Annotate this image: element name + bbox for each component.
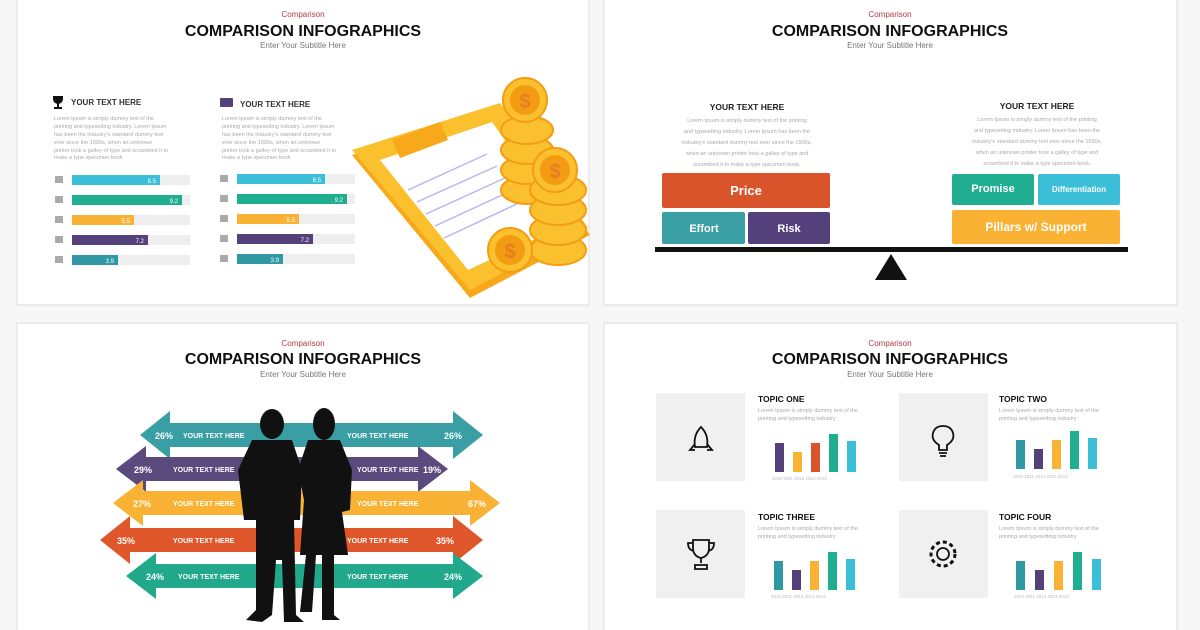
column 2 text: ever since the 1500s, when an unknown (222, 140, 320, 146)
arrows: 29% (134, 465, 152, 475)
arrows: YOUR TEXT HERE (173, 467, 235, 474)
topic two: TOPIC TWO (999, 394, 1047, 404)
arrows: 35% (436, 536, 454, 546)
scale beam and fulcrum (655, 247, 1128, 280)
illustration: clipboard with coins: $ (519, 91, 531, 113)
heading: bottom-right: Enter Your Subtitle Here (847, 370, 933, 379)
column 1 text (53, 96, 168, 161)
column 2 bars (220, 174, 355, 264)
column 2 text: has been the industry's standard dummy text (222, 132, 332, 138)
column 2 bars: 8.5 (313, 178, 322, 184)
blocks right: Promise (971, 183, 1015, 195)
arrows: 67% (468, 499, 486, 509)
topic one: 2010 2011 2012 2013 2014 (772, 476, 827, 481)
topic four: Lorem Ipsum is simply dummy text of the (999, 526, 1099, 532)
column 2 bars: 5.5 (287, 218, 296, 224)
heading: top-left: COMPARISON INFOGRAPHICS (185, 23, 421, 40)
heading: bottom-left: Comparison (281, 339, 325, 348)
text right: scrambled it to make a type specimen book. (983, 161, 1091, 167)
arrows: YOUR TEXT HERE (357, 501, 419, 508)
illustration: clipboard with coins: $ (549, 161, 561, 183)
heading: top-right: Comparison (868, 10, 912, 19)
text left: YOUR TEXT HERE (710, 102, 785, 112)
heading: top-right: COMPARISON INFOGRAPHICS (772, 23, 1008, 40)
topic four: 2010 2011 2012 2013 2014 (1014, 594, 1069, 599)
arrows: YOUR TEXT HERE (178, 574, 240, 581)
topic four: printing and typesetting industry (999, 534, 1077, 540)
column 1 text: make a type specimen book (54, 155, 123, 161)
arrows (100, 411, 500, 599)
panel: bottom-left arrows (17, 323, 589, 630)
text left: and typesetting industry. Lorem Ipsum has been the (684, 129, 810, 135)
silhouettes: business people (238, 408, 352, 622)
blocks right (952, 174, 1120, 244)
heading: bottom-right: COMPARISON INFOGRAPHICS (772, 351, 1008, 368)
text left: industry's standard dummy text ever since the 1500s, (682, 140, 812, 146)
column 2 text: Lorem Ipsum is simply dummy text of the (222, 116, 322, 122)
blocks right: Differentiation (1052, 185, 1106, 194)
blocks left: Price (730, 183, 762, 198)
topic one (656, 393, 858, 481)
topic three (656, 510, 858, 599)
topic three: printing and typesetting industry (758, 534, 836, 540)
text right: industry's standard dummy text ever since the 1500s, (972, 139, 1102, 145)
column 2 text: YOUR TEXT HERE (240, 100, 311, 109)
arrows: YOUR TEXT HERE (347, 433, 409, 440)
arrows: 19% (423, 465, 441, 475)
column 2 bars: 9.2 (335, 198, 344, 204)
topic four: TOPIC FOUR (999, 512, 1051, 522)
arrows: YOUR TEXT HERE (347, 538, 409, 545)
blocks right: Pillars w/ Support (985, 220, 1087, 234)
panel: top-left bars (17, 0, 590, 305)
text left: scrambled it to make a type specimen book. (693, 162, 801, 168)
column 2 text: printing and typesetting industry. Lorem Ipsum (222, 124, 335, 130)
heading: bottom-left: COMPARISON INFOGRAPHICS (185, 351, 421, 368)
column 1 bars: 5.5 (122, 219, 131, 225)
arrows: 26% (155, 431, 173, 441)
column 1 bars (55, 175, 190, 265)
heading: top-right (772, 10, 1008, 50)
blocks left: Risk (777, 223, 801, 235)
arrows: YOUR TEXT HERE (173, 501, 235, 508)
column 2 bars: 3.9 (271, 258, 280, 264)
heading: bottom-left (185, 339, 421, 379)
arrows: 24% (146, 572, 164, 582)
column 2 text (220, 98, 336, 161)
text right (972, 101, 1102, 167)
blocks left: Effort (689, 223, 719, 235)
arrows: YOUR TEXT HERE (347, 574, 409, 581)
text left (682, 102, 812, 168)
blocks left (662, 173, 830, 244)
arrows: 24% (444, 572, 462, 582)
text right: and typesetting industry. Lorem Ipsum has been the (974, 128, 1100, 134)
topic three: TOPIC THREE (758, 512, 815, 522)
topic three: Lorem Ipsum is simply dummy text of the (758, 526, 858, 532)
arrows: YOUR TEXT HERE (173, 538, 235, 545)
column 1 text: printing and typesetting industry. Lorem Ipsum (54, 124, 167, 130)
topic four (899, 510, 1101, 599)
column 2 bars: 7.2 (301, 238, 310, 244)
column 1 text: ever since the 1500s, when an unknown (54, 140, 152, 146)
arrows: 27% (133, 499, 151, 509)
arrows: YOUR TEXT HERE (357, 467, 419, 474)
heading: top-left: Comparison (281, 10, 325, 19)
column 1 text: YOUR TEXT HERE (71, 98, 142, 107)
topic one: printing and typesetting industry (758, 416, 836, 422)
heading: bottom-right: Comparison (868, 339, 912, 348)
text right: Lorem Ipsum is simply dummy text of the printing (977, 117, 1097, 123)
arrows: 35% (117, 536, 135, 546)
column 1 bars: 8.5 (148, 179, 157, 185)
heading: top-left (185, 10, 421, 50)
column 1 text: Lorem Ipsum is simply dummy text of the (54, 116, 154, 122)
heading: top-left: Enter Your Subtitle Here (260, 41, 346, 50)
text right: YOUR TEXT HERE (1000, 101, 1075, 111)
column 2 text: make a type specimen book (222, 155, 291, 161)
arrows: YOUR TEXT HERE (183, 433, 245, 440)
panel: bottom-right topics (604, 323, 1177, 630)
topic two (899, 393, 1099, 481)
text left: Lorem Ipsum is simply dummy text of the printing (687, 118, 807, 124)
column 1 text: printer took a galley of type and scrambled it to (54, 148, 168, 154)
topic two: 2010 2011 2012 2013 2014 (1013, 474, 1068, 479)
column 1 text: has been the industry's standard dummy text (54, 132, 164, 138)
column 1 bars: 3.9 (106, 259, 115, 265)
column 1 bars: 7.2 (136, 239, 145, 245)
topic two: Lorem Ipsum is simply dummy text of the (999, 408, 1099, 414)
panel: top-right balance (604, 0, 1177, 305)
heading: bottom-left: Enter Your Subtitle Here (260, 370, 346, 379)
topic one: Lorem Ipsum is simply dummy text of the (758, 408, 858, 414)
arrows: 26% (444, 431, 462, 441)
text left: when an unknown printer took a galley of type and (685, 151, 808, 157)
heading: bottom-right (772, 339, 1008, 379)
column 2 text: printer took a galley of type and scrambled it to (222, 148, 336, 154)
illustration: clipboard with coins: $ (504, 241, 516, 263)
text right: when an unknown printer took a galley of type and (975, 150, 1098, 156)
illustration: clipboard with coins (352, 78, 590, 298)
column 1 bars: 9.2 (170, 199, 179, 205)
heading: top-right: Enter Your Subtitle Here (847, 41, 933, 50)
topic two: printing and typesetting industry (999, 416, 1077, 422)
topic three: 2010 2011 2012 2013 2014 (771, 594, 826, 599)
topic one: TOPIC ONE (758, 394, 805, 404)
